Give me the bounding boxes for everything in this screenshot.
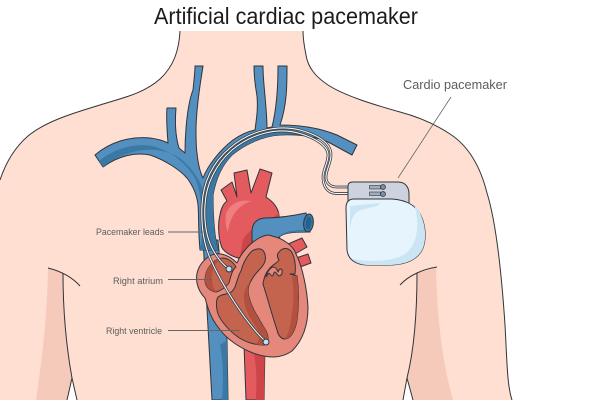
descending aorta bbox=[244, 345, 265, 400]
lead to right ventricle bbox=[202, 128, 370, 342]
valve flap bbox=[266, 267, 282, 277]
label: Pacemaker leads bbox=[96, 227, 203, 238]
title: Artificial cardiac pacemaker bbox=[154, 3, 418, 29]
arm shadow: right bbox=[407, 268, 453, 400]
label: Cardio pacemaker bbox=[398, 78, 507, 178]
heart bbox=[197, 235, 308, 357]
superior vena cava and veins bbox=[95, 66, 357, 250]
aorta bbox=[219, 169, 280, 258]
label: Pacemaker leads: Pacemaker leads bbox=[96, 227, 164, 238]
torso bbox=[0, 31, 512, 400]
device case bbox=[346, 199, 425, 265]
connectors bbox=[370, 184, 386, 196]
label: Right ventricle: Right ventricle bbox=[106, 326, 162, 337]
arm shadow: left bbox=[36, 268, 72, 400]
right ventricle chamber bbox=[216, 249, 268, 345]
lead to right atrium bbox=[205, 131, 370, 269]
label: Cardio pacemaker: Cardio pacemaker bbox=[403, 78, 507, 92]
armpit lines bbox=[48, 267, 437, 400]
label: Right ventricle bbox=[106, 326, 240, 337]
pulmonary arteries bbox=[288, 238, 311, 267]
pulmonary trunk tube bbox=[252, 213, 314, 250]
lead electrode: right atrium bbox=[226, 266, 232, 272]
pacemaker device bbox=[346, 182, 425, 265]
left heart chamber bbox=[263, 248, 298, 339]
lead electrode: right ventricle bbox=[263, 339, 269, 345]
heart wall bbox=[197, 235, 308, 357]
label: Right atrium bbox=[113, 276, 212, 287]
device header bbox=[348, 182, 409, 204]
label: Right atrium: Right atrium bbox=[113, 276, 163, 287]
pacemaker leads bbox=[202, 128, 370, 345]
descending vein bbox=[203, 240, 228, 400]
right atrium chamber bbox=[205, 258, 236, 292]
